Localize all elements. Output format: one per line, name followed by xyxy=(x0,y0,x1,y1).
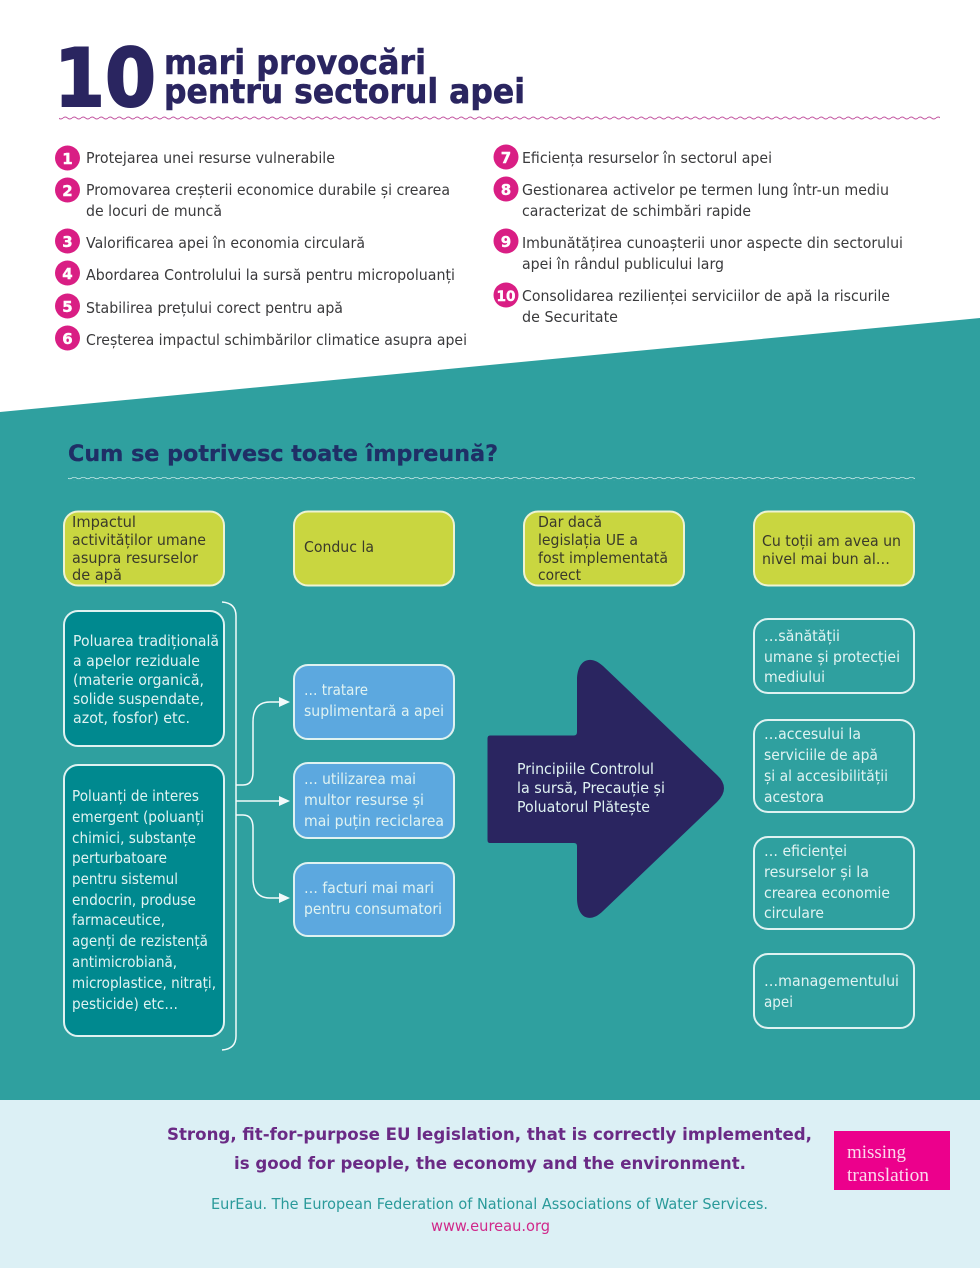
box: more resources: … utilizarea mai xyxy=(304,770,416,788)
item 2: 2 xyxy=(62,182,73,200)
box: extra treatment: … tratare xyxy=(304,681,368,699)
box: more resources: mai puțin reciclarea xyxy=(304,812,444,830)
item 4 xyxy=(55,260,455,286)
logo placeholder: missing xyxy=(847,1142,906,1163)
title: 10 xyxy=(54,32,156,125)
box: emerging pollutants: pentru sistemul xyxy=(72,870,178,888)
box: emerging pollutants: antimicrobiană, xyxy=(72,953,177,971)
big arrow: principles: la sursă, Precauție și xyxy=(517,779,665,797)
outcome: access: serviciile de apă xyxy=(764,746,878,764)
item 4: 4 xyxy=(62,265,73,283)
item 10: 10 xyxy=(496,289,516,305)
box: traditional pollution: Poluarea tradițională xyxy=(73,632,219,650)
header box: leads to: Conduc la xyxy=(304,538,374,556)
item 6: 6 xyxy=(62,330,73,348)
outcome: management: …managementului xyxy=(764,972,899,990)
box: traditional pollution: azot, fosfor) etc. xyxy=(73,709,190,727)
header box: better level: nivel mai bun al… xyxy=(762,550,890,568)
footer organisation line: EurEau. The European Federation of National Associations of Water Services. xyxy=(211,1195,768,1213)
header box: legislation: fost implementată xyxy=(538,549,668,567)
header box: impact: de apă xyxy=(72,566,122,584)
list: challenges 7 to 10 xyxy=(494,144,903,326)
header box: legislation: corect xyxy=(538,566,581,584)
box: emerging pollutants: pesticide) etc… xyxy=(72,995,178,1013)
item 2 xyxy=(55,178,450,220)
item 9 xyxy=(494,228,903,273)
outcome: access xyxy=(754,720,914,812)
title: pentru sectorul apei xyxy=(164,72,525,112)
outcome: efficiency: resurselor și la xyxy=(764,863,869,881)
header box: better level: Cu toții am avea un xyxy=(762,532,901,550)
item 7 xyxy=(494,144,772,170)
header box: impact: Impactul xyxy=(72,513,136,531)
box: emerging pollutants: farmaceutice, xyxy=(72,911,165,929)
footer website: www.eureau.org xyxy=(431,1217,550,1235)
header box: legislation: Dar dacă xyxy=(538,513,602,531)
box: emerging pollutants: chimici, substanțe xyxy=(72,829,196,847)
big arrow: principles: Principiile Controlul xyxy=(517,760,654,778)
box: emerging pollutants: agenți de rezistență xyxy=(72,932,208,950)
box: higher bills: pentru consumatori xyxy=(304,900,442,918)
box: traditional pollution: (materie organică, xyxy=(73,671,204,689)
item 9: apei în rândul publicului larg xyxy=(522,255,724,273)
header box: impact: activităților umane xyxy=(72,531,206,549)
box: extra treatment: suplimentară a apei xyxy=(304,702,444,720)
item 8: 8 xyxy=(501,181,511,199)
item 3: 3 xyxy=(62,233,73,251)
box: emerging pollutants: perturbatoare xyxy=(72,849,167,867)
box: higher bills xyxy=(294,863,454,936)
logo placeholder: translation xyxy=(847,1165,930,1186)
footer statement: is good for people, the economy and the environment. xyxy=(234,1154,746,1174)
outcome: management: apei xyxy=(764,993,793,1011)
box: higher bills: … facturi mai mari xyxy=(304,879,434,897)
big arrow: principles: Poluatorul Plătește xyxy=(517,798,650,816)
list: challenges 1 to 6 xyxy=(55,146,467,350)
footer statement: Strong, fit-for-purpose EU legislation, that is correctly implemented, xyxy=(167,1125,812,1145)
item 3: Valorificarea apei în economia circulară xyxy=(86,234,365,252)
item 6: Creșterea impactul schimbărilor climatice asupra apei xyxy=(86,331,467,349)
box: more resources xyxy=(294,763,454,838)
item 5: Stabilirea prețului corect pentru apă xyxy=(86,299,343,317)
outcome: health: …sănătății xyxy=(764,627,840,645)
item 10: de Securitate xyxy=(522,308,618,326)
big arrow: principles xyxy=(488,660,724,918)
title: mari provocări xyxy=(164,43,426,83)
item 5: 5 xyxy=(62,298,73,316)
box: emerging pollutants: emergent (poluanți xyxy=(72,808,204,826)
box: traditional pollution: solide suspendate, xyxy=(73,690,204,708)
teal background panel xyxy=(0,318,980,1100)
item 6 xyxy=(55,326,467,350)
header box: legislation: legislația UE a xyxy=(538,531,638,549)
outcome: efficiency: … eficienței xyxy=(764,842,847,860)
item 1 xyxy=(55,146,335,170)
bracket and connector arrows xyxy=(222,602,290,1050)
section heading: Cum se potrivesc toate împreună? xyxy=(68,442,498,467)
outcome: efficiency: crearea economie xyxy=(764,884,890,902)
box: emerging pollutants: endocrin, produse xyxy=(72,891,196,909)
footer statement xyxy=(167,1125,812,1174)
outcome: health: umane și protecției xyxy=(764,648,900,666)
header box: impact: asupra resurselor xyxy=(72,549,199,567)
box: traditional pollution: a apelor reziduale xyxy=(73,652,200,670)
header box: impact xyxy=(64,512,224,586)
item 9: 9 xyxy=(501,233,511,251)
item 2: Promovarea creșterii economice durabile și crearea xyxy=(86,181,450,199)
item 8: caracterizat de schimbări rapide xyxy=(522,202,751,220)
box: traditional pollution xyxy=(64,611,224,746)
item 5 xyxy=(55,294,343,318)
outcome: access: și al accesibilității xyxy=(764,767,888,785)
item 4: Abordarea Controlului la sursă pentru micropoluanți xyxy=(86,266,455,284)
header box: better level xyxy=(754,512,914,586)
header box: leads to xyxy=(294,512,454,586)
title xyxy=(54,32,525,125)
header box: legislation xyxy=(524,512,684,586)
item 10: Consolidarea rezilienței serviciilor de apă la riscurile xyxy=(522,287,890,305)
item 1: Protejarea unei resurse vulnerabile xyxy=(86,149,335,167)
outcome: health xyxy=(754,619,914,693)
outcome: efficiency xyxy=(754,837,914,929)
box: extra treatment xyxy=(294,665,454,739)
item 1: 1 xyxy=(62,150,73,168)
box: more resources: multor resurse și xyxy=(304,791,424,809)
outcome: management xyxy=(754,954,914,1028)
item 8: Gestionarea activelor pe termen lung într-un mediu xyxy=(522,181,889,199)
item 7: 7 xyxy=(501,149,511,167)
item 8 xyxy=(494,176,889,220)
outcome: access: acestora xyxy=(764,788,824,806)
outcome: efficiency: circulare xyxy=(764,904,824,922)
footer panel xyxy=(0,1100,980,1268)
outcome: access: …accesului la xyxy=(764,725,861,743)
item 2: de locuri de muncă xyxy=(86,202,222,220)
box: emerging pollutants xyxy=(64,765,224,1036)
item 9: Imbunătățirea cunoașterii unor aspecte din sectorului xyxy=(522,234,903,252)
item 7: Eficiența resurselor în sectorul apei xyxy=(522,149,772,167)
box: emerging pollutants: Poluanți de interes xyxy=(72,787,199,805)
item 3 xyxy=(55,228,365,254)
logo placeholder xyxy=(834,1131,950,1190)
outcome: health: mediului xyxy=(764,668,825,686)
item 10 xyxy=(494,282,890,326)
box: emerging pollutants: microplastice, nitrați, xyxy=(72,974,216,992)
